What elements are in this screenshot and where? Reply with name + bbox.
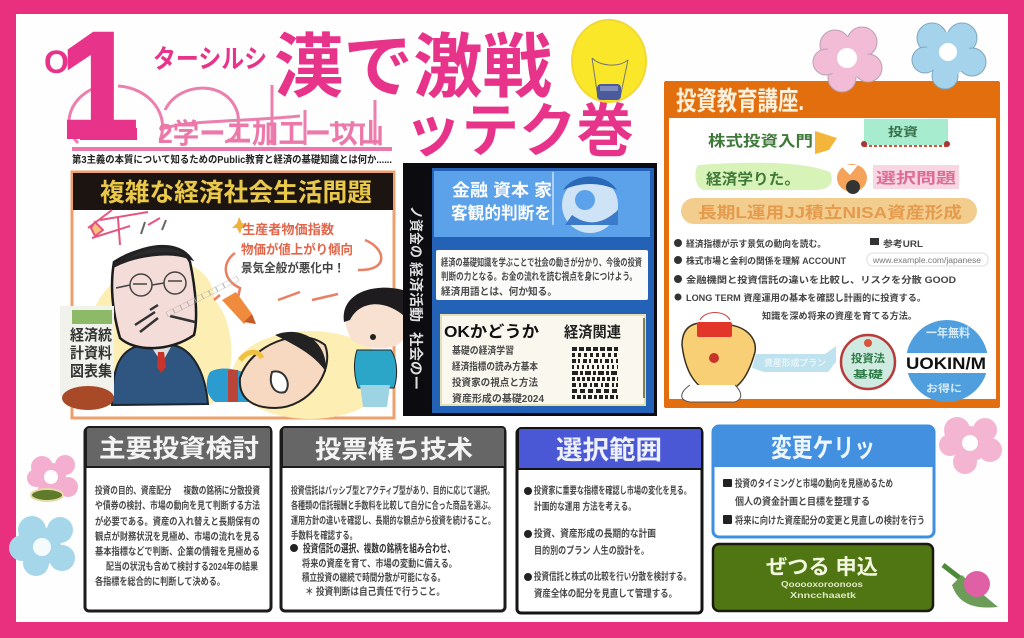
round badge: 投資法 [851,351,885,365]
spark lines [88,210,166,245]
round badge [841,335,895,389]
icon: document with QR pattern: 計資料 [70,344,112,362]
title: big numeral 1: 1 [60,1,138,169]
panel: green contact: ぜつる 申込 [766,556,878,579]
body text [95,484,260,588]
arrow banner: 資産形成プラン [764,357,826,368]
heading [282,427,505,467]
icon: pink flower top [813,27,882,92]
body text: 各指標を総合的に判断して決める。 [95,575,225,588]
body text: 運用方針の違いを確認し、長期的な観点から投資を続けること。 [291,514,495,527]
bullet list [674,238,957,321]
bullet items: 将来に向けた資産配分の変更と見直しの検討を行う [735,514,925,527]
bullet items: 投資、資産形成の長期的な計画 [534,527,656,540]
icon: globe [562,176,618,233]
heading [713,426,934,467]
tan pill [681,198,977,224]
body text: 将来の資産を育て、市場の変動に備える。 [302,557,457,570]
body text: 配当の状況も含めて検討する2024年の結果 [106,560,258,573]
blue round badge: UOKIN/M [906,354,986,373]
character: standing child [344,288,403,407]
bullet list: 知識を深め将来の資産を育てる方法。 [762,310,917,321]
pink label [873,165,959,189]
note box: 経済の基礎知識を学ぶことで社会の動きが分かり、今後の投資 [441,256,642,269]
banner [434,171,650,237]
panel: green contact: Qooooxoroonoos [781,580,864,589]
scroll box with QR [441,315,645,405]
bullet items: 投資信託と株式の比較を行い分散を検討する。 [534,570,691,583]
speech text: 物価が値上がり傾向 [241,242,353,257]
scroll box with QR: 資産形成の基礎2024 [452,392,544,405]
title: faint script underlay [69,85,392,149]
comic background blobs [90,261,231,405]
icon: document with QR pattern [60,306,114,410]
subtitle: 第3主義の本質について知るためのPublic教育と経済の基礎知識とは何か...... [72,153,392,166]
body text: 観点が財務状況を見極め、市場の流れを見る [95,530,260,543]
note box: 経済用語とは、何か知る。 [441,285,557,298]
character: yellow mascot [682,312,755,402]
heading: 変更ケリッ [771,433,875,463]
panel: bottom 2 [281,427,505,611]
panel: bottom 4 blue [713,426,934,537]
note box [436,250,648,300]
bullet items: 目的別のプラン 人生の設計を。 [534,544,649,557]
icon: pink flower right [939,417,1002,474]
icon: crayon [222,292,256,324]
panel: green contact: Xnncchaaetk [790,591,857,600]
icon: pink flower left with leaf [27,455,78,501]
QR code [572,349,618,397]
title: main line 2: ッテク巻 [404,99,634,164]
icon: document with QR pattern: 経済統 [70,327,112,344]
bullet items: 計画的な運用 方法を考える。 [534,500,636,513]
heading: 投資教育講座. [676,86,804,116]
bullet list: 株式市場と金利の関係を理解 ACCOUNT [686,255,846,266]
side note [867,238,988,266]
speech text: 景気全般が悪化中！ [241,260,345,275]
bullet list: 経済指標が示す景気の動向を読む。 [686,238,826,249]
body text: 各種類の信託報酬と手数料を比較して自分に合った商品を選ぶ。 [291,499,495,512]
panel: bottom 3 [517,428,702,613]
side note: 参考URL [883,238,924,249]
heading bar: 複雑な経済社会生活問題 [100,179,372,207]
icon: blue flower top [912,23,986,89]
heading: 選択範囲 [556,435,662,465]
body text: や債券の検討、市場の動向を見て判断する方法 [95,499,260,512]
teal flag [815,119,950,154]
panel: centre [403,163,657,416]
teal flag: 投資 [888,124,918,139]
icon: blue flower left [9,516,75,576]
body text: 投資信託はパッシブ型とアクティブ型があり、目的に応じて選択。 [291,484,494,497]
pink label: 選択問題 [876,170,956,187]
note box: 判断の力となる。お金の流れを読む視点を身につけよう。 [441,270,637,283]
scroll box with QR: 投資家の視点と方法 [452,376,538,389]
green label: 株式投資入門 [708,132,813,150]
bullet list: 金融機関と投資信託の違いを比較し、リスクを分散 GOOD [686,274,957,285]
heading: 投票権ち技术 [315,436,473,464]
blue round badge: 一年無料 [926,325,970,340]
arrow banner [752,346,836,372]
title [44,1,634,169]
speech text: 生産者物価指数 [242,222,334,237]
title: main line 1: 漢で激戦 [274,28,552,106]
side note: www.example.com/japanese [872,256,982,265]
vertical side text: 経済活動 [408,262,424,322]
icon: document with QR pattern: 図表集 [70,362,112,380]
heading [86,427,271,467]
title: faint script underlay: 2学ーエ加工ー以山 [158,118,384,149]
green brush label: 経済学りた。 [706,170,800,188]
icon: light bulb [572,20,646,102]
body text: 基本指標などで判断、企業の情報を見極める [95,545,260,558]
speech text [214,217,381,300]
bullet list: LONG TERM 資産運用の基本を確認し計画的に投資する。 [686,292,926,303]
bullet items: 投資家に重要な指標を確認し市場の変化を見る。 [534,484,691,497]
panel: left comic [60,172,403,419]
vertical side text: 社会のー [408,332,424,390]
body text: 積立投資の継続で時間分散が可能になる。 [302,571,445,584]
scroll box with QR: OKかどうか [444,323,539,341]
heading [518,428,702,469]
body text: が必要である。資産の入れ替えと長期保有の [95,515,260,528]
banner: 金融 資本 家 [452,180,552,200]
heading: 主要投資検討 [99,435,259,463]
character: crying child on floor [207,332,327,408]
green brush label [695,163,832,190]
banner: 客観的判断を [451,203,551,223]
tan pill: 長期L運用JJ積立NISA資産形成 [698,203,962,222]
bullet items [723,477,925,527]
panel: green contact [713,544,933,611]
body text: 投資信託の選択、複数の銘柄を組み合わせ、 [303,541,455,555]
icon: leaf with flower bud [943,565,998,608]
icon: fox [837,164,867,194]
body text: ＊ 投資判断は自己責任で行うこと。 [305,585,445,598]
scroll box with QR: 経済指標の読み方基本 [452,360,538,373]
bullet items: 投資のタイミングと市場の動向を見極めるため [735,477,893,490]
bullet items [524,484,691,600]
body text: 手数料を確認する。 [291,529,357,542]
blue round badge [904,320,988,402]
body text: 投資の目的、資産配分 複数の銘柄に分散投資 [95,484,260,497]
vertical side text [408,206,424,390]
vertical side text: ノ資金の [408,206,424,258]
scroll box with QR: 経済関連 [564,323,621,341]
body text [290,484,495,598]
bullet items: 個人の資金計画と目標を整理する [735,495,870,508]
panel: right orange [664,81,1000,408]
title: small kana: ターシルシ [153,44,267,74]
faint watermark boxes: □□□□□□□□□□ [164,273,241,319]
title: small O: O [44,44,69,80]
blue round badge: お得に [926,382,962,395]
scroll box with QR: 基礎の経済学習 [452,344,514,357]
panel: bottom 1 [85,427,271,611]
character: man in suit [112,246,208,405]
bullet items: 資産全体の配分を見直して管理する。 [534,587,677,600]
heading bar [73,173,393,210]
round badge: 基礎 [853,368,883,381]
